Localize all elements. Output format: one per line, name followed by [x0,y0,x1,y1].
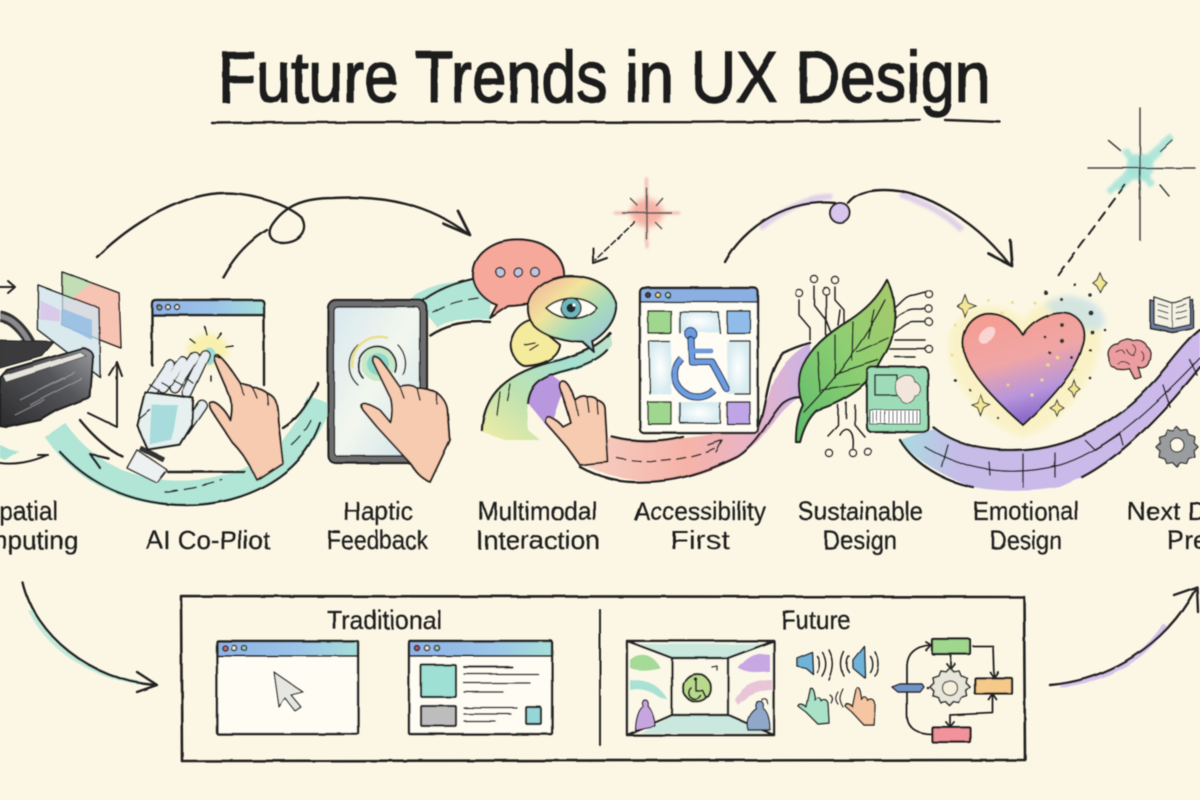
ribbon: teal path [55,277,490,505]
heading: traditional: Traditional [327,605,442,635]
hand [545,382,608,465]
wheelchair symbol [675,328,726,397]
arrow: ribbon direction [90,454,108,468]
icon: gear [1156,427,1198,467]
labels: trend names: Haptic [343,496,413,526]
yellow bubble [511,320,560,366]
human hand [209,354,283,480]
traditional window with cursor [217,641,358,734]
floating panel front [38,285,100,377]
panel: traditional versus future comparison [181,596,1025,761]
labels: trend names: Feedback [327,525,429,555]
icon: brain [1108,340,1151,379]
ribbon: multicolour path [482,333,612,440]
icon: sustainable leaf with circuit traces [796,276,932,456]
labels: trend names: Design [990,525,1062,555]
labels: trend names [0,496,1200,555]
icon: accessibility window [640,288,758,433]
speaker [853,646,865,678]
arrow: accessibility to emotional arc [725,190,1012,266]
arrow: pink ribbon direction [708,440,722,452]
window [152,300,264,315]
icon: VR headset with floating panels [0,272,122,464]
icon: AI co-pilot window with robot and human hands [127,300,283,483]
heart [963,313,1084,425]
ribbon: lilac stitched path [900,330,1200,491]
icon: open book [1150,297,1193,332]
future spatial room [627,641,774,735]
floating panel back [62,272,121,348]
icon: haptic tablet with touch rings [328,300,450,482]
robot palm [137,392,193,450]
headset strap [0,316,34,354]
labels: trend names: Multimodal [478,496,597,526]
traditional window with content layout [409,641,552,734]
robot thumb [185,405,202,430]
icon: teal sparkle with dashed line [1055,108,1195,280]
icon: emotional heart with sparkles [949,273,1107,437]
haptic rings [361,347,395,381]
gesture hand teal [798,688,829,724]
robot fingers [152,355,205,393]
heading: future: Future [781,605,851,635]
circuit traces [799,286,925,448]
layout tiles [648,311,671,333]
pink bubble [473,240,564,318]
chip [867,367,928,432]
labels: trend names: First [670,525,731,555]
title: Future Trends in UX Design [218,38,990,118]
glow [949,299,1100,437]
labels: trend names: Emotional [973,496,1079,526]
icon: pink sparkle with dashed arrow [593,178,680,263]
robot forearm [127,450,167,483]
labels: trend names: AI Co-Pliot [146,525,271,555]
megaphone [797,652,813,674]
arrows around headset [0,281,122,464]
icon: multimodal speech bubbles with eye [473,240,616,465]
eye bubble [528,276,616,352]
sparkles and particles [957,273,1107,416]
headset visor [0,348,93,427]
touch point [188,334,228,366]
arrow: down into comparison panel [23,583,157,692]
leaf blade [796,280,895,442]
labels: trend names: Sustainable [798,496,923,526]
gesture hand peach [845,688,875,725]
labels: trend names: Design [823,525,897,555]
labels: trend names: Interaction [476,525,600,555]
arrow: out of comparison panel [1050,587,1198,685]
arrow: spatial to haptic arc [97,193,470,277]
ribbon: pink to lilac path [580,343,812,482]
hand [362,356,450,482]
future adaptive flow diagram [892,639,1012,742]
labels: trend names: Accessibility [634,496,766,526]
future voice and gesture icons [797,646,878,725]
